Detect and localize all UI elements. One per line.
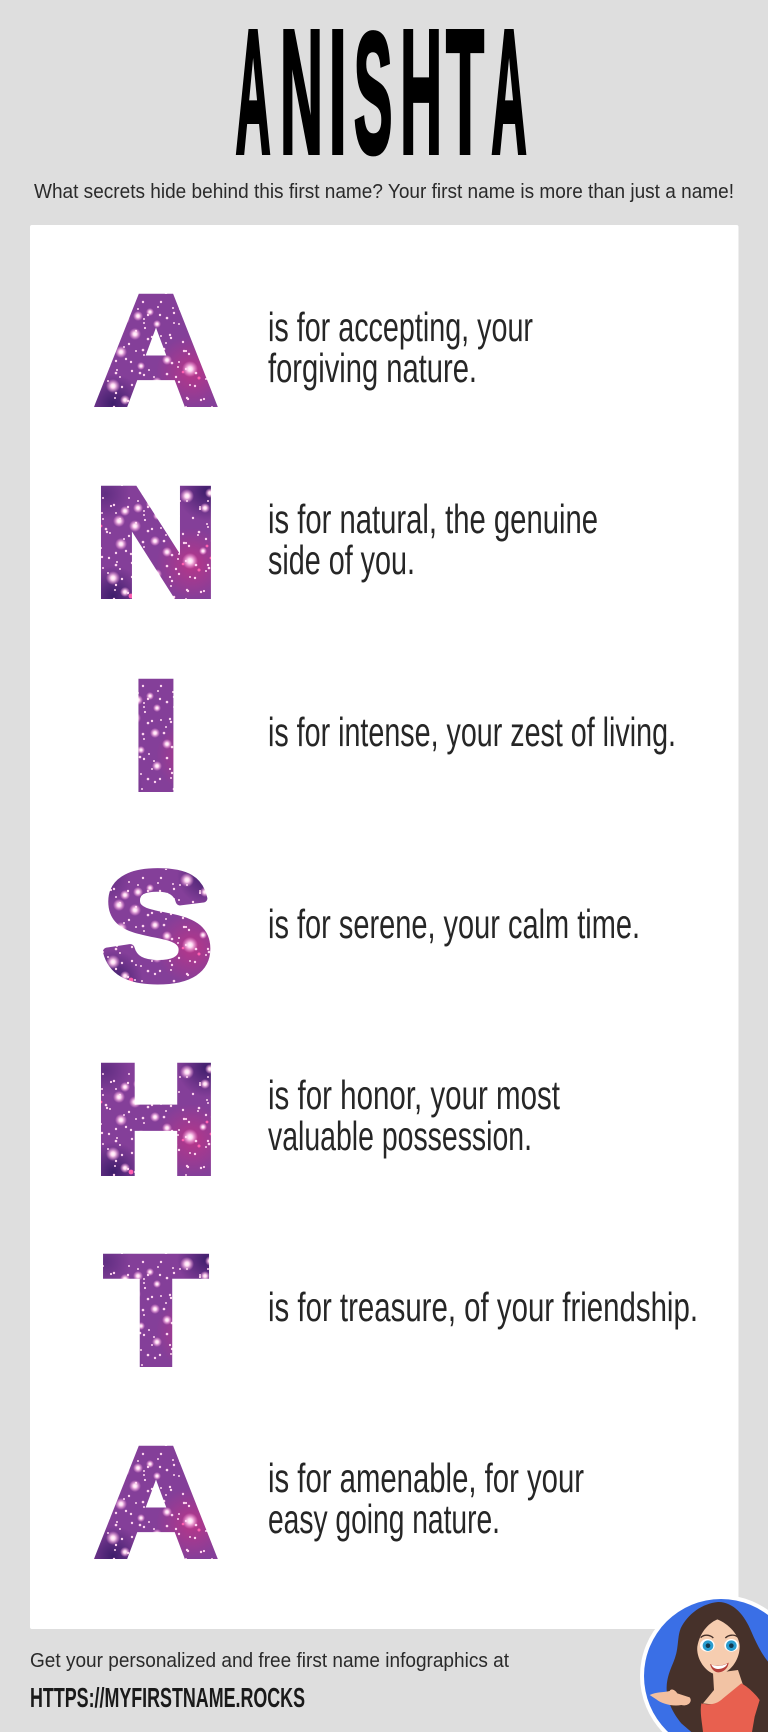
description: natural: side of you. xyxy=(268,537,415,583)
description: amenable: easy going nature. xyxy=(268,1496,500,1542)
description: accepting xyxy=(268,304,533,391)
description: accepting: is for accepting, your xyxy=(268,304,533,350)
description: honor: is for honor, your most xyxy=(268,1072,560,1118)
letter H: H xyxy=(94,1034,218,1205)
icon: avatar woman in blue circle xyxy=(640,1595,768,1732)
row: letter T, treasure xyxy=(106,1225,698,1396)
letter I: I xyxy=(131,650,181,821)
title: S xyxy=(354,0,392,190)
description: natural: is for natural, the genuine xyxy=(268,496,598,542)
letter N: N xyxy=(94,457,218,628)
footer prompt: Get your personalized and free first name infographics at xyxy=(30,1650,509,1672)
title xyxy=(236,0,527,191)
subtitle: What secrets hide behind this first name? Your first name is more than just a name! xyxy=(34,181,734,203)
footer url: HTTPS://MYFIRSTNAME.ROCKS xyxy=(30,1682,305,1713)
row: letter N, natural xyxy=(94,457,598,628)
description: natural xyxy=(268,496,598,583)
row: letter A, accepting xyxy=(96,265,533,436)
letter T: T xyxy=(106,1225,207,1396)
letter A: A xyxy=(96,265,216,436)
row: letter S, serene xyxy=(102,841,640,1012)
row: letter A, amenable xyxy=(96,1417,584,1588)
description: accepting: forgiving nature. xyxy=(268,345,477,391)
description: amenable xyxy=(268,1455,584,1542)
row: letter I, intense xyxy=(131,650,676,821)
letter S: S xyxy=(102,841,212,1012)
description: amenable: is for amenable, for your xyxy=(268,1455,584,1501)
row: letter H, honor xyxy=(94,1034,560,1205)
description: honor: valuable possession. xyxy=(268,1113,532,1159)
letter A: A xyxy=(96,1417,216,1588)
description: honor xyxy=(268,1072,560,1159)
panel: name letters xyxy=(30,225,738,1629)
